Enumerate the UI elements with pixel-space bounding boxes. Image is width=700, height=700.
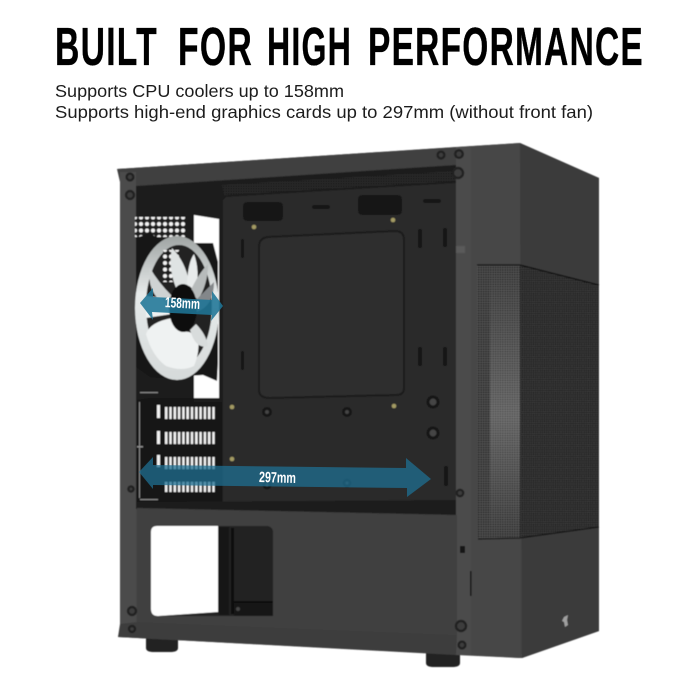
brand logo mark	[562, 615, 568, 627]
PSU opening	[151, 526, 273, 616]
tray slots and cutouts	[241, 195, 448, 486]
fan ring	[135, 236, 219, 380]
text block: specifications	[55, 81, 593, 122]
PC case illustration	[117, 143, 599, 667]
lower mesh band	[136, 500, 456, 516]
text block: specifications: Supports high-end graphics cards up to 297mm (without front fan)	[55, 102, 593, 122]
brass screws	[230, 218, 396, 461]
top rail	[117, 147, 456, 186]
fan	[135, 233, 219, 381]
fan hub	[169, 284, 197, 332]
title: FOR	[178, 17, 253, 77]
arrow: 158mm cooler clearance	[140, 288, 223, 321]
bottom rail	[118, 622, 457, 655]
text block: specifications: Supports CPU coolers up to 158mm	[55, 81, 344, 101]
rear perforated vent	[135, 217, 187, 237]
title: BUILT	[55, 17, 158, 77]
tray standoffs	[264, 397, 438, 488]
CPU cutout	[259, 231, 404, 398]
fan blades	[146, 248, 214, 369]
case outer body	[117, 143, 599, 658]
PCI slot covers	[157, 405, 215, 492]
case front frame	[456, 143, 520, 658]
front mesh panel	[477, 265, 599, 539]
expansion bracket	[137, 398, 222, 507]
case feet	[146, 638, 460, 667]
left rail	[120, 172, 136, 628]
rear interior	[136, 165, 456, 510]
front frame details	[456, 246, 472, 596]
PSU shroud	[137, 508, 457, 635]
title	[55, 17, 644, 77]
fan frame	[136, 233, 218, 381]
case right side face	[520, 143, 599, 658]
bracket rails	[137, 392, 158, 500]
arrow: 297mm graphics card clearance	[139, 457, 431, 497]
top mesh vent	[222, 171, 456, 195]
rear white window	[194, 215, 219, 398]
case screws	[126, 150, 466, 648]
motherboard tray	[223, 183, 456, 503]
title: HIGH	[267, 17, 352, 77]
label: 158mm: 158mm	[165, 295, 200, 313]
label: 297mm: 297mm	[259, 469, 296, 487]
